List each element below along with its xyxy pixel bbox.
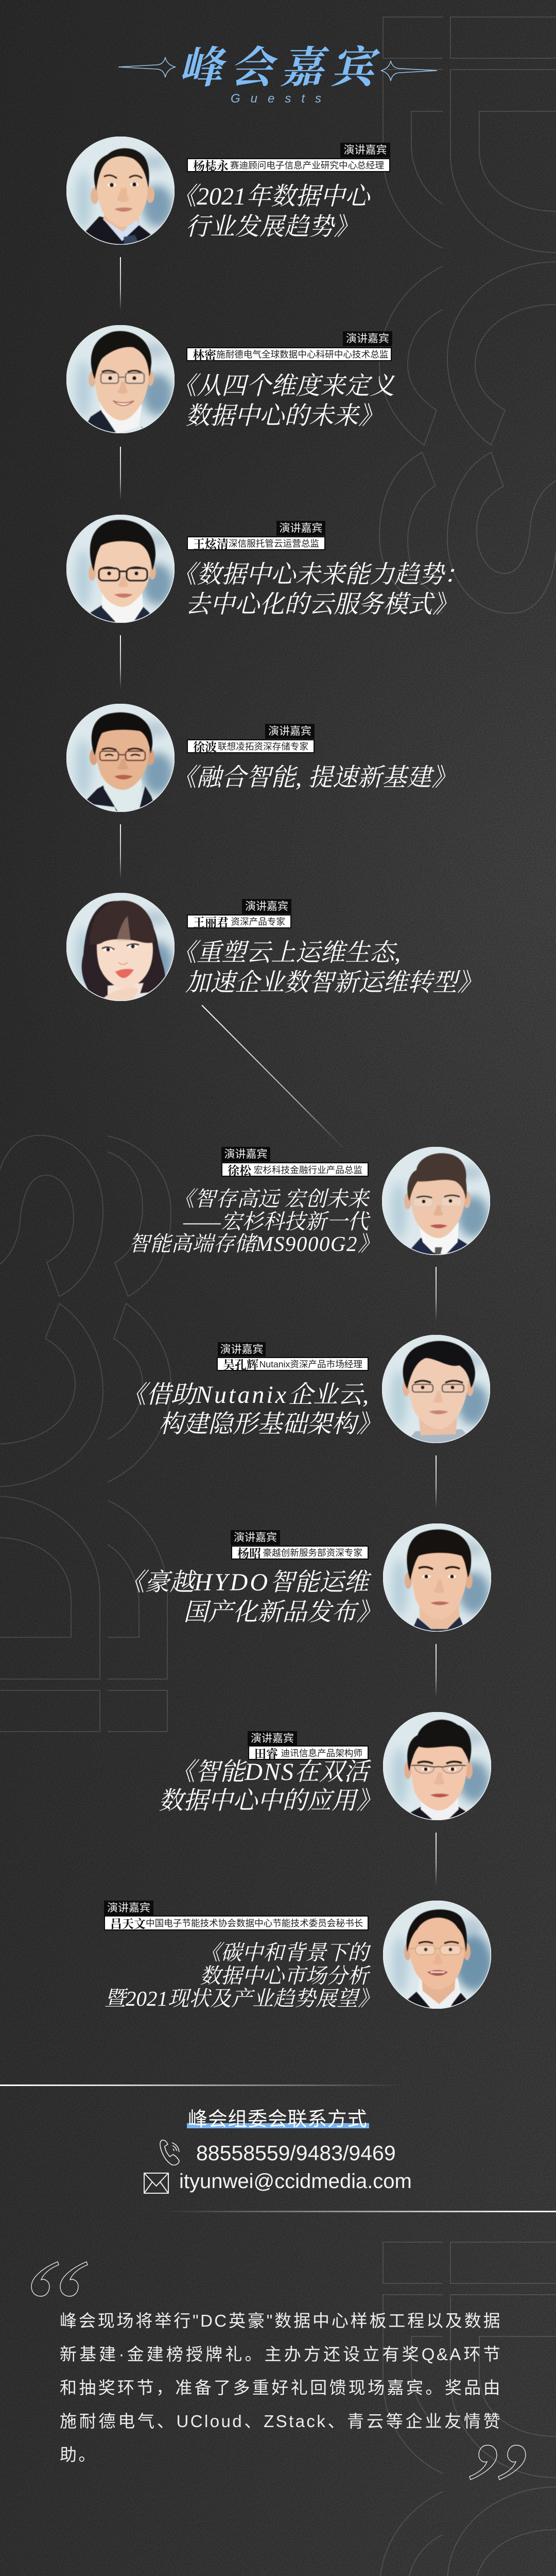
text block: closing remarks: 施耐德电气、UCloud、ZStack、青云等企业友情赞 bbox=[60, 2412, 502, 2431]
portrait: 吕天文 bbox=[383, 1901, 491, 2009]
talk title: 《从四个维度来定义 bbox=[172, 372, 394, 400]
portrait: 吴孔辉 bbox=[382, 1335, 490, 1443]
talk title: 《2021年数据中心 bbox=[172, 182, 370, 210]
talk title: 《融合智能, 提速新基建》 bbox=[172, 764, 456, 791]
name bar bbox=[187, 914, 291, 928]
tag: 演讲嘉宾: 演讲嘉宾 bbox=[234, 1532, 277, 1544]
talk title: 加速企业数智新运维转型》 bbox=[185, 969, 482, 996]
name bar: 田睿 bbox=[254, 1748, 278, 1760]
portrait: 田睿 bbox=[383, 1712, 491, 1820]
talk title: 去中心化的云服务模式》 bbox=[185, 591, 457, 618]
subtitle: Guests: Guests bbox=[231, 92, 332, 106]
panel: contact bbox=[144, 2107, 413, 2195]
name bar: 吕天文 bbox=[110, 1918, 146, 1930]
guest 10 bbox=[103, 1901, 491, 2009]
name bar bbox=[187, 158, 390, 172]
name bar: 杨梽永 bbox=[193, 160, 229, 173]
talk title: 《智存高远 宏创未来 bbox=[173, 1187, 369, 1211]
guest 7 bbox=[124, 1335, 491, 1444]
name bar bbox=[186, 347, 392, 361]
name bar bbox=[187, 536, 325, 550]
talk title bbox=[105, 1941, 369, 2010]
talk title: 数据中心市场分析 bbox=[200, 1964, 369, 1988]
guest 5 bbox=[66, 893, 482, 1001]
talk title bbox=[159, 1758, 369, 1816]
talk title: 《数据中心未来能力趋势： bbox=[172, 561, 468, 588]
tag: 演讲嘉宾 bbox=[104, 1901, 153, 1916]
icon: opening quote bbox=[31, 2261, 89, 2298]
talk title: 《碳中和背景下的 bbox=[200, 1941, 369, 1964]
connector 1 bbox=[120, 257, 121, 311]
tag: 演讲嘉宾: 演讲嘉宾 bbox=[346, 333, 389, 345]
talk title bbox=[172, 372, 395, 430]
name bar: 资深产品专家 bbox=[231, 917, 285, 927]
talk title bbox=[172, 561, 468, 618]
name bar bbox=[221, 1162, 369, 1177]
icon: phone bbox=[160, 2140, 185, 2165]
talk title: 数据中心的未来》 bbox=[185, 402, 383, 430]
tag: 演讲嘉宾: 演讲嘉宾 bbox=[279, 522, 322, 534]
connector 3 bbox=[120, 635, 121, 689]
text block: closing remarks: 峰会现场将举行"DC英豪"数据中心样板工程以及数据 bbox=[60, 2311, 502, 2330]
talk title: 《豪越HYDO智能运维 bbox=[120, 1569, 369, 1596]
name bar: 施耐德电气全球数据中心科研中心技术总监 bbox=[216, 349, 388, 360]
icon: closing quote bbox=[468, 2444, 526, 2481]
name bar: 豪越创新服务部资深专家 bbox=[263, 1548, 362, 1558]
icon: mail bbox=[144, 2173, 169, 2194]
name bar: 王丽君 bbox=[193, 916, 229, 929]
portrait: 林密 bbox=[66, 325, 175, 433]
talk title: 行业发展趋势》 bbox=[185, 213, 358, 240]
icon: decorative stars bbox=[118, 57, 438, 81]
tag: 演讲嘉宾 bbox=[343, 331, 392, 346]
tag: 演讲嘉宾: 演讲嘉宾 bbox=[107, 1902, 150, 1914]
tag: 演讲嘉宾: 演讲嘉宾 bbox=[344, 144, 387, 156]
talk title: 《智能DNS在双活 bbox=[170, 1758, 369, 1786]
connector 4 bbox=[120, 824, 121, 879]
tag: 演讲嘉宾 bbox=[265, 724, 315, 739]
name bar: 徐松 bbox=[228, 1164, 251, 1177]
guest 4 bbox=[66, 704, 456, 812]
guest 2 bbox=[66, 325, 395, 433]
portrait: 徐波 bbox=[66, 704, 175, 812]
name bar: 迪讯信息产品架构师 bbox=[281, 1748, 362, 1758]
guest 9 bbox=[124, 1712, 491, 1821]
name bar bbox=[187, 739, 315, 753]
guest 8 bbox=[124, 1523, 491, 1632]
name bar: Nutanix资深产品市场经理 bbox=[259, 1359, 362, 1369]
tag: 演讲嘉宾 bbox=[231, 1530, 280, 1545]
name bar: 王炫清 bbox=[193, 538, 229, 551]
tag: 演讲嘉宾: 演讲嘉宾 bbox=[251, 1733, 294, 1744]
text block: closing remarks: 和抽奖环节，准备了多重好礼回馈现场嘉宾。奖品由 bbox=[60, 2378, 502, 2397]
connector 2 bbox=[120, 447, 121, 500]
heading text: 峰会嘉宾 bbox=[179, 44, 381, 92]
name bar bbox=[231, 1546, 369, 1560]
talk title: 智能高端存储MS9000G2》 bbox=[129, 1232, 379, 1256]
text block: closing remarks bbox=[60, 2304, 502, 2471]
tag: 演讲嘉宾: 演讲嘉宾 bbox=[245, 901, 288, 912]
guest 1 bbox=[66, 137, 390, 245]
guest 3 bbox=[66, 515, 468, 623]
tag: 演讲嘉宾 bbox=[242, 899, 291, 914]
text block: closing remarks: 新基建·金建榜授牌礼。主办方还设立有奖Q&A环节 bbox=[60, 2345, 502, 2364]
tag: 演讲嘉宾 bbox=[340, 143, 390, 158]
phone number: 88558559/9483/9469 bbox=[196, 2141, 396, 2165]
talk title bbox=[121, 1380, 369, 1438]
connector: diagonal line bbox=[201, 1004, 347, 1151]
heading underline bbox=[187, 2123, 369, 2128]
talk title: 《借助Nutanix企业云, bbox=[121, 1381, 369, 1409]
name bar: 中国电子节能技术协会数据中心节能技术委员会秘书长 bbox=[146, 1918, 363, 1928]
talk title bbox=[185, 938, 482, 998]
connector 6 bbox=[436, 1267, 437, 1321]
name bar: 深信服托管云运营总监 bbox=[229, 538, 319, 549]
portrait: 徐松 bbox=[382, 1147, 490, 1255]
talk title: 构建隐形基础架构》 bbox=[159, 1411, 381, 1437]
connector 9 bbox=[436, 1833, 437, 1886]
text block: closing remarks: 助。 bbox=[60, 2445, 97, 2464]
portrait: 王丽君 bbox=[66, 893, 175, 1001]
talk title: ——宏杉科技新一代 bbox=[183, 1210, 369, 1233]
tag: 演讲嘉宾: 演讲嘉宾 bbox=[268, 725, 311, 737]
talk title: 暨2021现状及产业趋势展望》 bbox=[105, 1987, 379, 2010]
name bar: 杨昭 bbox=[237, 1547, 261, 1560]
talk title: 国产化新品发布》 bbox=[183, 1599, 381, 1626]
title: 峰会嘉宾 heading bbox=[118, 44, 438, 106]
talk title: 数据中心中的应用》 bbox=[159, 1787, 381, 1815]
talk title bbox=[129, 1188, 369, 1255]
portrait: 王炫清 bbox=[66, 515, 175, 623]
connector 8 bbox=[436, 1644, 437, 1697]
talk title bbox=[172, 182, 370, 240]
tag: 演讲嘉宾: 演讲嘉宾 bbox=[220, 1344, 264, 1355]
name bar bbox=[248, 1745, 369, 1760]
name bar: 宏杉科技金融行业产品总监 bbox=[254, 1164, 362, 1175]
name bar bbox=[217, 1357, 369, 1371]
portrait: 杨梽永 bbox=[66, 137, 175, 245]
email: ityunwei@ccidmedia.com bbox=[179, 2170, 412, 2193]
name bar: 联想凌拓资深存储专家 bbox=[218, 741, 308, 752]
heading: 峰会组委会联系方式: 峰会组委会联系方式 bbox=[188, 2103, 367, 2131]
name bar: 徐波 bbox=[193, 741, 217, 754]
tag: 演讲嘉宾: 演讲嘉宾 bbox=[224, 1148, 268, 1160]
talk title bbox=[120, 1568, 369, 1628]
talk title: 《重塑云上运维生态, bbox=[172, 939, 401, 967]
guest 6 bbox=[124, 1147, 491, 1256]
connector 7 bbox=[436, 1455, 437, 1509]
name bar bbox=[104, 1916, 369, 1930]
portrait: 杨昭 bbox=[383, 1523, 491, 1632]
name bar: 林密 bbox=[193, 349, 216, 362]
name bar: 赛迪顾问电子信息产业研究中心总经理 bbox=[230, 160, 384, 171]
name bar: 吴孔辉 bbox=[223, 1359, 258, 1371]
